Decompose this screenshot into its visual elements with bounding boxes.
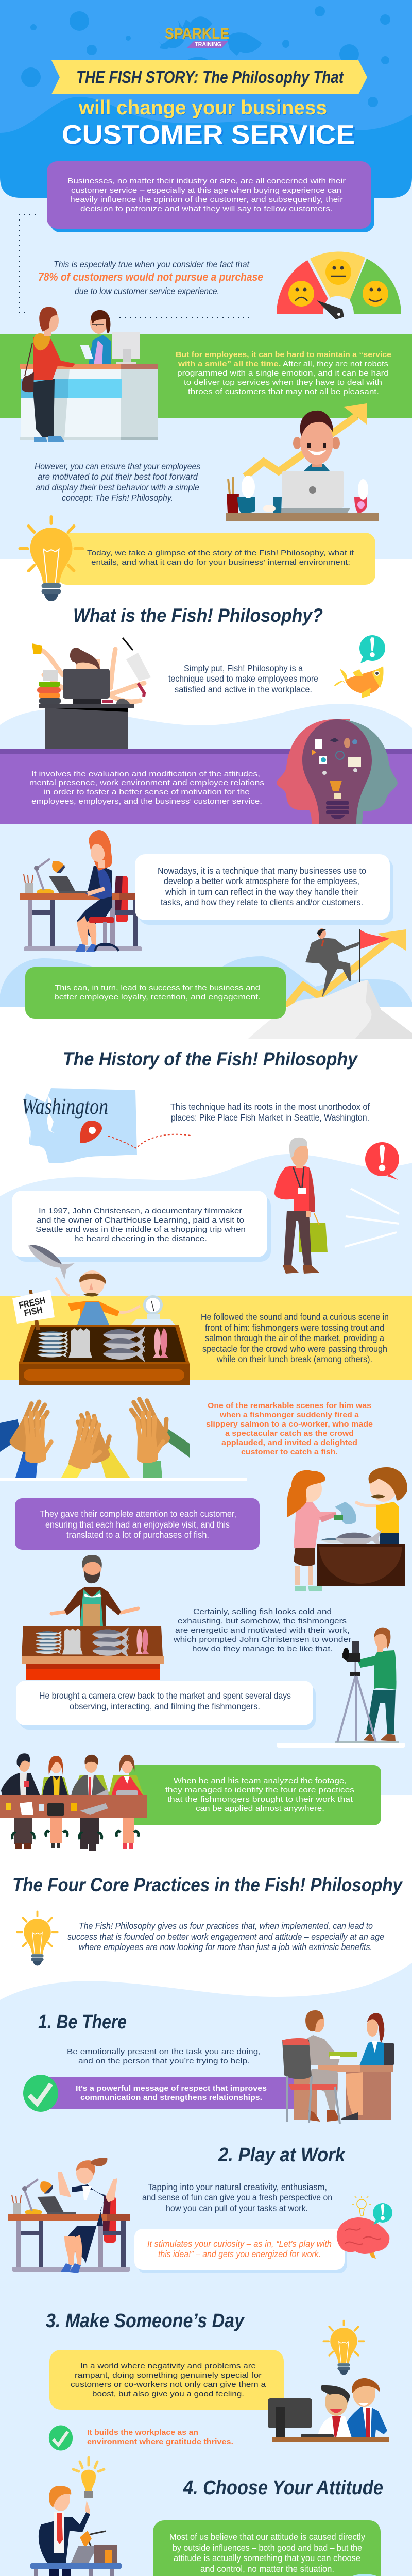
illustration: cheerful woman at desk (8, 2158, 130, 2273)
panel: purple evaluation band (0, 749, 412, 824)
italic text: Fish concept (35, 461, 200, 503)
text: selling fish: Certainly, selling fish looks cold and (193, 1608, 332, 1616)
callout: gratitude (49, 2426, 233, 2450)
panel: curiosity (134, 2229, 347, 2273)
panel: green band: But for employees, it can be hard to maintain a “service (176, 351, 391, 359)
text: selling fish (173, 1608, 351, 1653)
illustration: bearded fishmonger at counter (22, 1555, 164, 1680)
text: curious scene: spectacle for the crowd who were passing through (202, 1344, 387, 1354)
panel: complete attention: They gave their complete attention to each customer, (40, 1509, 236, 1519)
panel: Nowadays: tasks, and how they relate to clients and/or customers. (161, 897, 363, 907)
panel: John Christensen: and the owner of ChartHouse Learning, paid a visit to (37, 1216, 244, 1225)
panel: negativity (49, 2350, 284, 2410)
title line two: will change your business (78, 97, 327, 119)
illustration: customer at reception desk (20, 307, 158, 442)
panel: team analysis: When he and his team analyzed the footage, (174, 1777, 347, 1785)
panel: green success (25, 967, 286, 1019)
panel: curiosity: It stimulates your curiosity – as in, “Let’s play with (147, 2239, 332, 2249)
panel: complete attention (15, 1498, 260, 1550)
statistic text: 78% of customers would not pursue a purchase (38, 270, 263, 283)
italic text: Fish concept: concept: The Fish! Philosophy. (62, 493, 173, 503)
panel: attitude: Most of us believe that our attitude is caused directly (169, 2532, 365, 2542)
panel: camera crew: observing, interacting, and filming the fishmongers. (70, 1701, 260, 1711)
statistic text: This is especially true when you consider the fact that (54, 259, 250, 269)
panel: purple evaluation band: mental presence, work environment and employee relations (29, 779, 264, 787)
text: remarkable scenes (206, 1402, 373, 1456)
gauge chart (277, 252, 401, 319)
panel: green success: This can, in turn, lead to success for the business and (55, 984, 260, 992)
panel: curiosity: this idea!” – and gets you energized for work. (158, 2249, 321, 2259)
icon: light bulb (323, 2321, 364, 2375)
illustration: two people meeting at desk (282, 2010, 394, 2124)
text: remarkable scenes: One of the remarkable scenes for him was (208, 1402, 371, 1410)
title line three: CUSTOMER SERVICE (62, 120, 355, 150)
illustration: multitasking man at desk (32, 638, 151, 749)
statistic text (38, 259, 263, 296)
illustration: fish stall with fishmonger: FISH (23, 1304, 43, 1318)
heading: 1. Be There: 1. Be There (38, 2011, 127, 2033)
illustration: fish stall with fishmonger: FRESH (18, 1295, 46, 1311)
text: curious scene: front of him: fishmongers were tossing trout and (205, 1323, 384, 1333)
icon: red exclamation bubble (365, 1142, 399, 1180)
icon: bulb with rays (73, 2458, 104, 2498)
heading: What is the Fish! Philosophy: What is the Fish! Philosophy? (73, 605, 323, 626)
callout: gratitude: environment where gratitude thrives. (87, 2438, 233, 2446)
text: four practices (67, 1921, 384, 1952)
text: selling fish: exhausting, but somehow, the fishmongers (178, 1617, 347, 1625)
panel: negativity: boost, but also give you a good feeling. (92, 2390, 244, 2398)
panel: Nowadays (135, 854, 393, 925)
illustration: man with idea at blue desk (0, 2486, 122, 2576)
text: curious scene (201, 1312, 389, 1364)
panel: Nowadays: develop a better work atmosphere for the employees, (164, 876, 359, 886)
text: tapping creativity: how you can pull of your tasks at work. (166, 2203, 308, 2213)
panel: team analysis (129, 1765, 381, 1825)
italic text: Fish concept: and display their best behavior with a simple (36, 482, 199, 493)
decorative rays (345, 1189, 399, 1247)
panel: negativity: rampant, doing something genuinely special for (75, 2371, 262, 2380)
map: Washington (22, 1088, 191, 1163)
decorative hills and success illustration (0, 928, 412, 1039)
text: simply put (168, 663, 318, 694)
panel: John Christensen: Seattle and was in the middle of a shopping trip when (36, 1226, 246, 1234)
map: Washington: Washington (22, 1094, 108, 1119)
panel: John Christensen (12, 1191, 271, 1279)
text: curious scene: salmon through the air of the market, providing a (205, 1333, 384, 1343)
panel: green success: better employee loyalty, retention, and engagement. (54, 993, 261, 1002)
callout: powerful message (23, 2075, 294, 2112)
text: tapping creativity: and sense of fun can give you a fresh perspective on (142, 2192, 332, 2202)
callout: gratitude: It builds the workplace as an (87, 2429, 198, 2437)
panel: camera crew: He brought a camera crew back to the market and spent several days (39, 1690, 291, 1701)
title banner: THE FISH STORY: The Philosophy That (76, 67, 345, 87)
panel: purple evaluation band: in order to foster a better sense of motivation for the (44, 788, 250, 796)
panel: team analysis: that the fishmongers brought to their work that (167, 1795, 353, 1804)
icon: fish with exclamation bubble (334, 635, 385, 698)
header background (0, 0, 412, 198)
title banner (52, 60, 367, 94)
icon: tuna (23, 1238, 75, 1279)
text: be emotionally present: Be emotionally present on the task you are doing, (67, 2048, 261, 2056)
panel: John Christensen: he heard cheering in the distance. (74, 1235, 207, 1243)
panel: green band: with a smile” all the time. After all, they are not robots (178, 360, 388, 368)
illustration: happy man with laptop and rising arrow (226, 403, 379, 521)
panel: attitude: attitude is actually something that you can choose (174, 2553, 360, 2563)
panel: intro: decision to patronize and what they will say to fellow customers. (80, 205, 333, 213)
panel: camera crew (16, 1681, 316, 1730)
illustration: photographer with tripod (277, 1628, 405, 1748)
text: tapping creativity (142, 2182, 332, 2213)
text: simply put: technique used to make employees more (168, 673, 318, 684)
text: remarkable scenes: when a fishmonger suddenly fired a (219, 1411, 359, 1419)
text: four practices: where employees are now looking for more than just a job with extrinsic benefits. (79, 1942, 372, 1952)
text: selling fish: which prompted John Christensen to wonder (173, 1636, 351, 1644)
illustration: two heads with idea bulb (277, 719, 398, 824)
illustration: clapping hands (0, 1392, 247, 1481)
statistic text: due to low customer service experience. (75, 286, 219, 296)
panel: negativity: In a world where negativity and problems are (80, 2362, 256, 2370)
panel: intro: customer service – especially at this age when buying experience can (71, 187, 341, 195)
panel: purple evaluation band: employees, employers, and the business’ customer service. (31, 798, 262, 806)
panel: today callout with light bulb (20, 517, 375, 601)
illustration: girl buying fish from boy (287, 1467, 407, 1591)
panel: intro: Businesses, no matter their industry or size, are all concerned with their (67, 177, 346, 185)
text: roots: places: Pike Place Fish Market in Seattle, Washington. (171, 1112, 369, 1123)
panel: green band (0, 334, 412, 418)
panel: complete attention: translated to a lot of purchases of fish. (66, 1530, 209, 1540)
text: curious scene: while on their lunch break (among others). (216, 1354, 372, 1364)
text: remarkable scenes: slippery salmon to a co-worker, who made (206, 1420, 373, 1429)
illustration: team of four at table (0, 1753, 147, 1851)
panel: green band: programmed with a single emotion, and it can be hard (177, 369, 389, 378)
panel: attitude: by outside influences – both good and bad – but the (173, 2543, 362, 2553)
panel: purple evaluation band: It involves the evaluation and modification of the attitudes, (31, 770, 260, 778)
text: selling fish: are energetic and motivated with their work, (175, 1626, 350, 1635)
panel: intro (47, 161, 374, 232)
heading: 3. Make Someone's Day: 3. Make Someone’s Day (46, 2310, 245, 2332)
panel: team analysis: can be applied almost anywhere. (196, 1805, 324, 1813)
dotted connector (19, 214, 250, 317)
illustration: two colleagues laughing at computer (268, 2378, 389, 2442)
heading: 4. Choose Your Attitude: 4. Choose Your Attitude (183, 2477, 383, 2499)
italic text: Fish concept: However, you can ensure that your employees (35, 461, 200, 471)
text: roots (170, 1101, 370, 1123)
panel: negativity: customers or co-workers not only can give them a (71, 2381, 266, 2389)
text: selling fish: how do they manage to be like that. (192, 1645, 333, 1653)
illustration: man with shopping bag (274, 1138, 328, 1274)
text: four practices: The Fish! Philosophy gives us four practices that, when implemented, can lead to (79, 1921, 373, 1931)
callout: powerful message: It’s a powerful message of respect that improves (76, 2084, 267, 2093)
text: simply put: Simply put, Fish! Philosophy is a (184, 663, 303, 673)
illustration: fish stall with fishmonger (12, 1270, 190, 1385)
text: remarkable scenes: customer to catch a fish. (241, 1448, 338, 1456)
italic text: Fish concept: are motivated to put their best foot forward (38, 471, 198, 482)
text: remarkable scenes: applauded, and invited a delighted (221, 1439, 357, 1447)
panel: John Christensen: In 1997, John Christensen, a documentary filmmaker (39, 1207, 242, 1215)
icon: brain with bulb and bubble (337, 2196, 392, 2259)
panel: team analysis: they managed to identify the four core practices (165, 1786, 354, 1794)
icon: light bulb (17, 1912, 58, 1966)
heading: History: The History of the Fish! Philosophy (63, 1048, 358, 1070)
panel: attitude: and control, no matter the situation. (200, 2564, 334, 2574)
text: be emotionally present: and on the person that you’re trying to help. (78, 2057, 250, 2065)
text: be emotionally present (67, 2048, 261, 2065)
logo: Sparkle Training: TRAINING (195, 41, 221, 48)
band: yellow fish market (0, 1296, 412, 1380)
panel: Nowadays: Nowadays, it is a technique that many businesses use to (158, 866, 366, 876)
panel: green band: to deliver top services when they have to deal with (184, 379, 382, 387)
illustration: woman working at desk (20, 830, 142, 952)
logo: Sparkle Training: SPARKLE (165, 25, 229, 42)
panel: attitude (153, 2520, 381, 2576)
logo: Sparkle Training (165, 25, 229, 48)
icon: brain bulb (328, 2574, 402, 2576)
text: roots: This technique had its roots in the most unorthodox of (170, 1101, 370, 1112)
callout: powerful message: communication and strengthens relationships. (80, 2094, 262, 2102)
panel: today callout with light bulb: entails, and what it can do for your business’ internal environment: (91, 558, 350, 567)
panel: Nowadays: which in turn can reflect in the way they handle their (165, 887, 358, 897)
panel: complete attention: ensuring that each had an enjoyable visit, and this (45, 1519, 230, 1530)
panel: today callout with light bulb: Today, we take a glimpse of the story of the Fish! Philosophy, what it (87, 549, 354, 557)
text: remarkable scenes: a spectacular catch as the crowd (225, 1430, 354, 1438)
panel: intro: heavily influence the opinion of the customer, and subsequently, their (70, 196, 343, 204)
panel: green band: throes of customers that may not all be pleasant. (188, 388, 379, 396)
heading: 2. Play at Work: 2. Play at Work (218, 2144, 346, 2166)
text: curious scene: He followed the sound and found a curious scene in (201, 1312, 389, 1322)
text: four practices: success that is founded on better work engagement and attitude – especially at an age (67, 1931, 384, 1942)
text: simply put: satisfied and active in the workplace. (175, 684, 312, 694)
text: tapping creativity: Tapping into your natural creativity, enthusiasm, (148, 2182, 327, 2192)
